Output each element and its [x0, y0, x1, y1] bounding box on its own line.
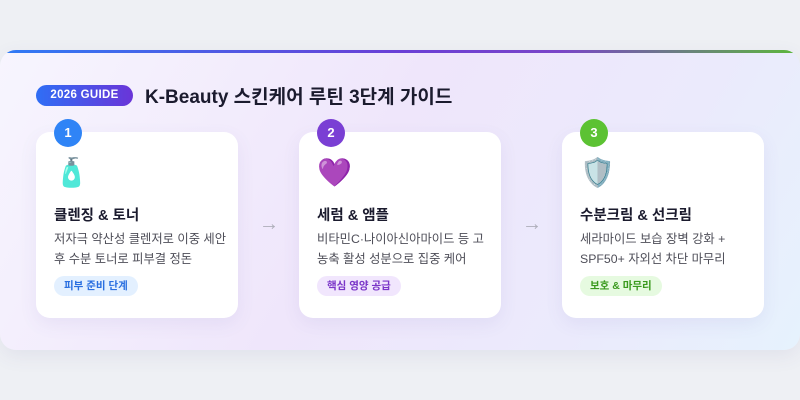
description: 세라마이드 보습 장벽 강화 +: [580, 232, 725, 246]
badge: 2026 guide: [36, 85, 133, 106]
title: K-Beauty 스킨케어 루틴 3단계 가이드: [145, 87, 452, 108]
main panel: [0, 50, 800, 350]
tag: [317, 276, 401, 296]
card: step 3: [562, 132, 764, 318]
description: [317, 232, 484, 266]
step number 3: [580, 119, 608, 147]
tag: 피부 준비 단계: [64, 280, 128, 292]
icon: shield: 🛡️: [580, 156, 615, 189]
description: 비타민C·나이아신아마이드 등 고: [317, 232, 484, 246]
step number 2: [317, 119, 345, 147]
step number 2: 2: [327, 125, 335, 140]
tag: [580, 276, 662, 296]
heading: 세럼 & 앰플: [317, 208, 389, 224]
heading: 수분크림 & 선크림: [580, 208, 692, 224]
icon: purple heart: 💜: [317, 156, 352, 189]
description: 저자극 약산성 클렌저로 이중 세안: [54, 232, 226, 246]
arrow: →: [259, 213, 279, 235]
card: step 2: [299, 132, 501, 318]
arrow: →: [522, 213, 542, 235]
description: 후 수분 토너로 피부결 정돈: [54, 252, 192, 266]
tag: [54, 276, 138, 296]
tag: 핵심 영양 공급: [327, 280, 391, 292]
icon: lotion bottle: 🧴: [54, 156, 89, 189]
step number 3: 3: [590, 125, 598, 140]
step number 1: 1: [64, 125, 72, 140]
badge: 2026 guide: 2026 GUIDE: [50, 89, 119, 101]
description: 농축 활성 성분으로 집중 케어: [317, 252, 466, 266]
heading: 클렌징 & 토너: [54, 208, 139, 224]
card: step 1: [36, 132, 238, 318]
description: SPF50+ 자외선 차단 마무리: [580, 252, 726, 266]
description: [54, 232, 226, 266]
tag: 보호 & 마무리: [590, 280, 652, 292]
step number 1: [54, 119, 82, 147]
description: [580, 232, 726, 266]
